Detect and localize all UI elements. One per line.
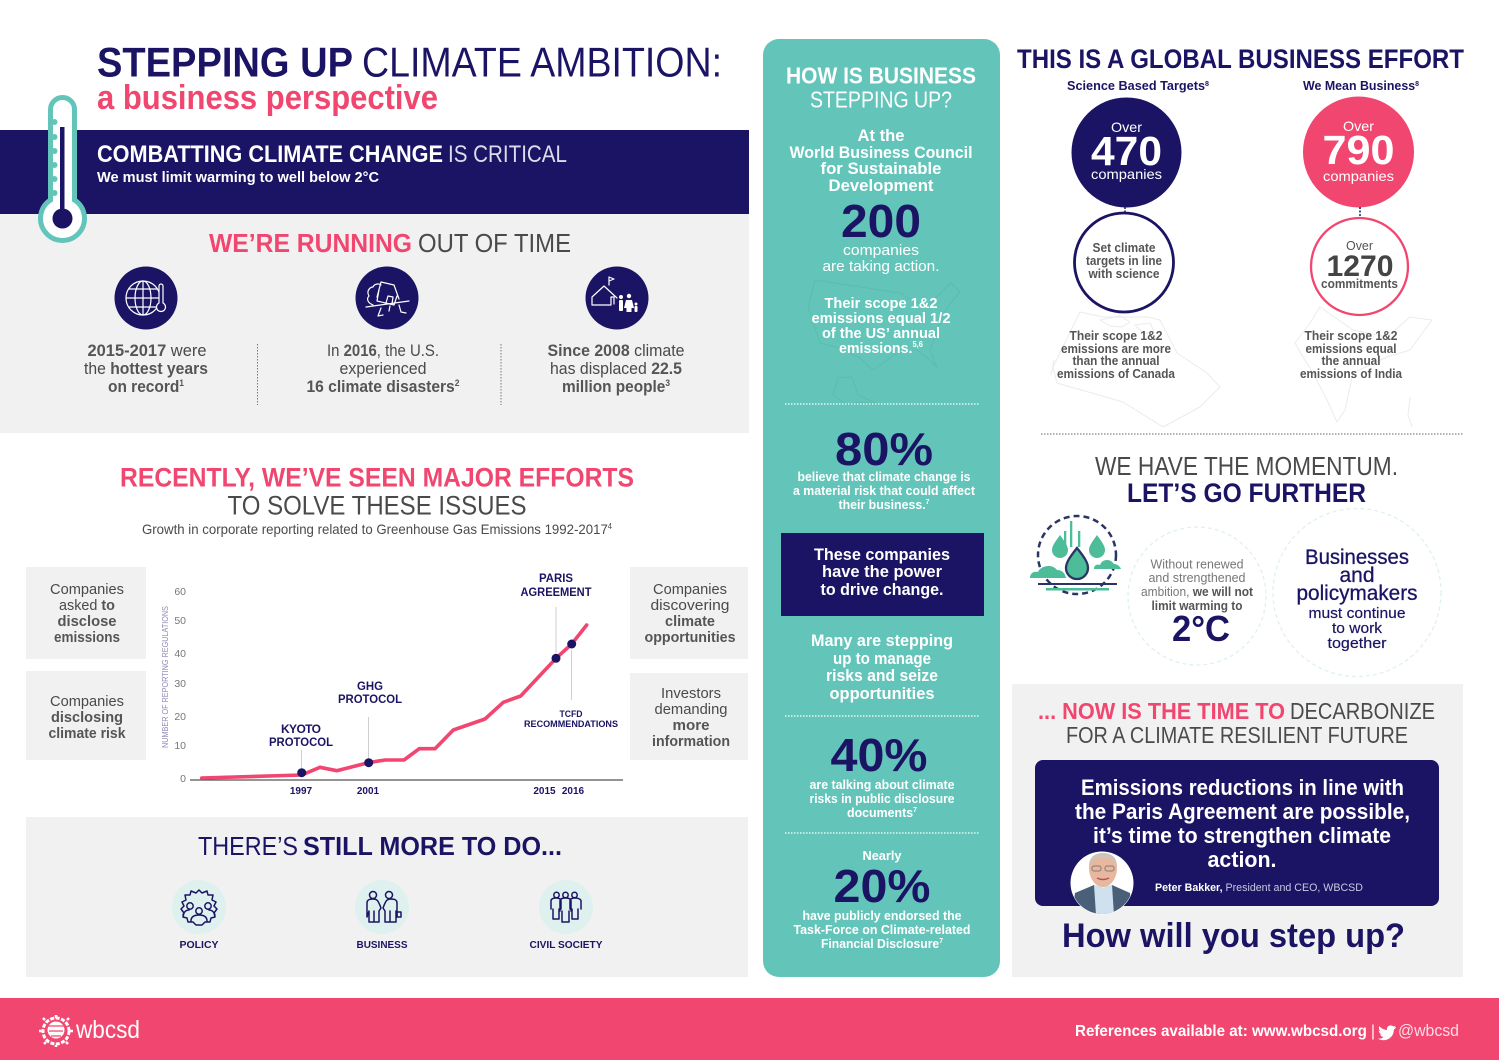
heading: we have the momentum: [1095, 451, 1398, 508]
stat: nearly 20%: Nearly: [862, 849, 902, 863]
panel: still more to do: [26, 817, 748, 977]
box: climate opportunities: opportunities: [644, 629, 736, 646]
quote box: it’s time to strengthen climate: [1093, 823, 1391, 848]
text: climate disasters: 16 climate disasters: [306, 378, 463, 396]
heading: we have the momentum: LET’S GO FURTHER: [1127, 478, 1366, 508]
icon: globe with thermometer: [114, 266, 178, 330]
box: asked to disclose: Companies: [50, 581, 124, 598]
text: displaced people: [548, 342, 684, 396]
text: stepping up to manage risk: [811, 632, 953, 703]
text: hottest years: [84, 342, 208, 396]
callout: businesses and policymakers: policymakers: [1296, 582, 1418, 605]
text: hottest years: 2015-2017 were: [88, 342, 206, 360]
stat: 40%: are talking about climate: [810, 778, 955, 792]
TCFD label: TCFD: [560, 709, 583, 720]
stat circle: 470 companies: [1072, 98, 1182, 208]
heading: we have the momentum: WE HAVE THE MOMENTUM.: [1095, 451, 1398, 481]
text: india emissions: Their scope 1&2: [1304, 328, 1398, 343]
stat circle: 790 companies: 790: [1322, 127, 1394, 173]
box: investors demanding information: information: [652, 733, 730, 750]
ring: 1270 commitments: Over: [1346, 239, 1373, 253]
y axis labels: [174, 586, 186, 785]
callout: businesses and policymakers: to work: [1332, 620, 1383, 637]
text: displaced people: 3: [665, 378, 670, 388]
heading: still more to do: [198, 831, 562, 861]
text: displaced people: million people: [562, 378, 673, 396]
stat: nearly 20%: 7: [939, 938, 943, 945]
y axis labels: 20: [174, 711, 186, 723]
y axis labels: 40: [174, 648, 186, 660]
box: asked to disclose: asked to: [59, 597, 115, 614]
stat: 80%: a material risk that could affect: [793, 484, 976, 498]
event labels: AGREEMENT: [520, 585, 592, 599]
callout: businesses and policymakers: must continue: [1308, 605, 1406, 622]
stat: 80%: their business.: [838, 498, 927, 512]
text: climate disasters: [306, 342, 460, 396]
stat circle: 790 companies: Over: [1343, 118, 1374, 134]
box: asked to disclose: disclose: [58, 613, 116, 630]
column label: science based targets: 8: [1205, 81, 1209, 88]
box: asked to disclose: emissions: [54, 629, 120, 646]
text: india emissions: the annual: [1322, 353, 1380, 368]
map: Canada: [1051, 312, 1220, 427]
text: india emissions: [1300, 328, 1403, 381]
box: climate opportunities: [630, 567, 748, 659]
text: climate disasters: experienced: [340, 360, 426, 378]
stat: 200 companies: 200: [841, 195, 921, 247]
text: WBCSD intro: Development: [828, 177, 934, 195]
heading: now is the time: [1038, 698, 1435, 748]
footer: [0, 998, 1499, 1060]
stat: 80%: 80%: [835, 423, 933, 475]
box: climate opportunities: climate: [665, 613, 715, 630]
callout: without renewed ambition: Without renewed: [1150, 558, 1244, 572]
text: climate disasters: In 2016, the U.S.: [327, 342, 439, 360]
stat: 40%: documents: [847, 806, 914, 820]
stat: 40%: 40%: [830, 729, 928, 781]
y axis labels: 0: [180, 773, 186, 785]
map: United States: [808, 280, 960, 405]
event labels: [269, 571, 592, 749]
text: canada emissions: than the annual: [1072, 353, 1160, 368]
label: business: BUSINESS: [356, 939, 408, 951]
callout: power to drive change: These companies: [814, 545, 950, 564]
event labels: PROTOCOL: [338, 692, 402, 706]
text: scope emissions: [812, 295, 950, 357]
stat: nearly 20%: [794, 849, 970, 951]
callout: power to drive change: to drive change.: [820, 580, 944, 599]
logo mark: [39, 1015, 73, 1047]
text: displaced people: Since 2008 climate: [548, 342, 684, 360]
text: canada emissions: [1057, 328, 1176, 381]
box: disclosing climate risk: [26, 671, 146, 760]
heading: how is business stepping up: [786, 62, 976, 112]
text: WBCSD intro: for Sustainable: [820, 160, 942, 178]
box: disclosing climate risk: climate risk: [48, 725, 126, 742]
box: climate opportunities: Companies: [653, 581, 727, 598]
box: investors demanding information: Investors: [661, 685, 721, 702]
text: hottest years: the hottest years: [84, 360, 208, 378]
quote box: [1035, 760, 1439, 906]
stat: nearly 20%: Task-Force on Climate-related: [794, 923, 970, 937]
event labels: PROTOCOL: [269, 735, 333, 749]
heading: now is the time: FOR A CLIMATE RESILIENT FUTURE: [1066, 722, 1408, 748]
stat: 40%: 7: [913, 807, 917, 814]
year labels: 2016: [562, 786, 585, 797]
callout: businesses and policymakers: and: [1340, 564, 1374, 587]
icon: displaced family and house: [586, 266, 648, 330]
callout: businesses and policymakers: [1273, 508, 1441, 676]
stat: nearly 20%: Financial Disclosure: [821, 937, 943, 951]
icon: civil society: [539, 880, 593, 934]
stat: 40%: [810, 729, 955, 820]
icon: business: [355, 880, 409, 934]
callout: power to drive change: have the power: [822, 562, 942, 581]
callout: businesses and policymakers: Businesses: [1305, 546, 1409, 569]
text: displaced people: has displaced 22.5: [550, 360, 682, 378]
ring: 1270 commitments: 1270: [1326, 250, 1394, 283]
text: scope emissions: of the US’ annual: [822, 325, 940, 342]
heading: major efforts: [120, 462, 634, 520]
quote box: action.: [1208, 847, 1276, 872]
text: scope emissions: 5,6: [912, 340, 924, 349]
quote attribution: Peter Bakker, President and CEO, WBCSD: [1155, 882, 1363, 894]
stat: 80%: believe that climate change is: [798, 470, 971, 484]
heading: still more to do: THERE’S: [198, 831, 298, 861]
stat: 200 companies: are taking action.: [822, 258, 940, 275]
text: scope emissions: emissions equal 1/2: [812, 310, 950, 327]
heading: how is business stepping up: HOW IS BUSINESS: [786, 62, 976, 88]
stat: 80%: [793, 423, 976, 512]
icon: policy: [172, 880, 226, 934]
box: disclosing climate risk: Companies: [50, 693, 124, 710]
heading: now is the time: ... NOW IS THE TIME TO: [1038, 698, 1285, 724]
event labels: KYOTO: [281, 722, 321, 736]
ring: set climate targets: with science: [1088, 267, 1160, 281]
box: investors demanding information: more: [672, 717, 710, 734]
callout: without renewed ambition: limit warming to: [1152, 599, 1243, 613]
text: scope emissions: emissions.: [839, 340, 917, 357]
column label: science based targets: Science Based Targets: [1067, 79, 1203, 93]
text: stepping up to manage risk: opportunities: [830, 685, 934, 703]
main title: STEPPING UP: [97, 38, 353, 86]
text: WBCSD intro: [790, 127, 972, 195]
line chart: reporting regulations: [160, 571, 623, 797]
text: WBCSD intro: At the: [858, 127, 904, 145]
box: asked to disclose: [26, 567, 146, 659]
box: investors demanding information: demanding: [654, 701, 728, 718]
heading: running out of time: WE’RE RUNNING: [209, 228, 412, 258]
callout: without renewed ambition: and strengthened: [1148, 571, 1246, 585]
panel: how is business stepping up: [763, 39, 1000, 977]
text: india emissions: emissions of India: [1300, 366, 1403, 381]
stat circle: 470 companies: companies: [1091, 166, 1162, 182]
references: References available at: www.wbcsd.org |: [1075, 1023, 1375, 1040]
label: civil society: CIVIL SOCIETY: [530, 939, 602, 951]
data points: [297, 640, 576, 777]
chart caption: Growth in corporate reporting related to Greenhouse Gas Emissions 1992-2017: [142, 521, 635, 537]
text: hottest years: on record: [108, 378, 184, 396]
stat: 80%: 7: [926, 499, 930, 506]
heading: now is the time: DECARBONIZE: [1290, 698, 1435, 724]
box: disclosing climate risk: disclosing: [51, 709, 123, 726]
heading: running out of time: OUT OF TIME: [418, 228, 571, 258]
data line: [202, 625, 587, 778]
box: investors demanding information: [630, 673, 748, 760]
year labels: 1997: [290, 786, 313, 797]
twitter handle: @wbcsd: [1398, 1022, 1459, 1040]
ring: set climate targets: Set climate: [1092, 241, 1156, 255]
text: stepping up to manage risk: up to manage: [833, 650, 931, 668]
quote box: the Paris Agreement are possible,: [1075, 799, 1410, 824]
stat circle: 790 companies: companies: [1323, 168, 1394, 184]
year labels: 2015: [533, 786, 556, 797]
main title: [97, 38, 722, 86]
map: India: [1295, 307, 1432, 427]
text: climate disasters: 2: [455, 378, 460, 388]
text: canada emissions: emissions are more: [1061, 341, 1171, 356]
callout: without renewed ambition: ambition, we will not: [1141, 585, 1254, 599]
main title: CLIMATE AMBITION:: [362, 38, 722, 86]
banner heading: COMBATTING CLIMATE CHANGE: [97, 141, 443, 168]
stat: 200 companies: companies: [843, 242, 919, 259]
callout: without renewed ambition: 2°C: [1172, 608, 1230, 649]
callout: without renewed ambition: [1128, 527, 1266, 665]
banner subheading: We must limit warming to well below 2°C: [97, 170, 380, 186]
ring: set climate targets: [1074, 213, 1174, 312]
text: hottest years: 1: [179, 378, 184, 388]
heading: running out of time: [209, 228, 571, 258]
year labels: 2001: [357, 786, 380, 797]
quote box: Emissions reductions in line with: [1081, 775, 1404, 800]
stat: nearly 20%: have publicly endorsed the: [802, 909, 962, 923]
callout: power to drive change: [781, 533, 984, 616]
portrait: Peter Bakker: [1070, 852, 1134, 915]
event labels: PARIS: [539, 571, 573, 585]
text: canada emissions: emissions of Canada: [1057, 366, 1176, 381]
stat: nearly 20%: 20%: [834, 860, 930, 912]
stat: 40%: risks in public disclosure: [810, 792, 955, 806]
panel: running out of time: [0, 214, 749, 433]
icon: twitter: [1378, 1025, 1396, 1040]
text: canada emissions: Their scope 1&2: [1070, 328, 1162, 343]
stat: 200 companies: [822, 195, 940, 275]
callout: businesses and policymakers: together: [1328, 635, 1386, 652]
panel: now is the time: [1012, 684, 1463, 977]
stat circle: 470 companies: Over: [1111, 119, 1142, 135]
heading: how is business stepping up: STEPPING UP?: [810, 86, 952, 112]
label: policy: POLICY: [179, 939, 219, 951]
event labels: GHG: [357, 679, 383, 693]
year labels: [290, 786, 585, 797]
heading: major efforts: RECENTLY, WE’VE SEEN MAJOR EFFORTS: [120, 462, 634, 492]
call to action: How will you step up?: [1062, 917, 1405, 955]
text: stepping up to manage risk: Many are stepping: [811, 632, 953, 650]
column label: we mean business: 8: [1415, 81, 1419, 88]
text: WBCSD intro: World Business Council: [790, 144, 972, 162]
text: stepping up to manage risk: risks and seize: [826, 667, 938, 685]
box: climate opportunities: discovering: [650, 597, 730, 614]
ring: set climate targets: targets in line: [1086, 254, 1162, 268]
ring: 1270 commitments: [1311, 218, 1408, 315]
heading: major efforts: TO SOLVE THESE ISSUES: [228, 490, 526, 520]
stat circle: 470 companies: 470: [1091, 128, 1162, 174]
stat circle: 790 companies: [1303, 96, 1414, 208]
logo wordmark: wbcsd: [75, 1016, 140, 1044]
ring: 1270 commitments: commitments: [1321, 277, 1398, 291]
y axis title: NUMBER OF REPORTING REGULATIONS: [160, 606, 170, 748]
icon: thermometer: [40, 98, 84, 240]
TCFD label: RECOMMENDATIONS: [524, 719, 618, 730]
panel: critical banner: [0, 130, 749, 214]
column label: we mean business: We Mean Business: [1303, 79, 1416, 93]
y axis labels: 60: [174, 586, 186, 598]
heading: still more to do: STILL MORE TO DO...: [303, 831, 562, 861]
y axis labels: 10: [174, 740, 186, 752]
text: india emissions: emissions equal: [1306, 341, 1396, 356]
banner heading: IS CRITICAL: [448, 141, 567, 168]
text: scope emissions: Their scope 1&2: [824, 295, 938, 312]
TCFD label: [524, 709, 618, 730]
chart caption: 4: [608, 522, 613, 531]
y axis labels: 30: [174, 678, 186, 690]
y axis labels: 50: [174, 615, 186, 627]
icon: damaged house: [356, 266, 418, 330]
subtitle: a business perspective: [97, 79, 438, 117]
icon: water and clouds: [1030, 516, 1121, 594]
